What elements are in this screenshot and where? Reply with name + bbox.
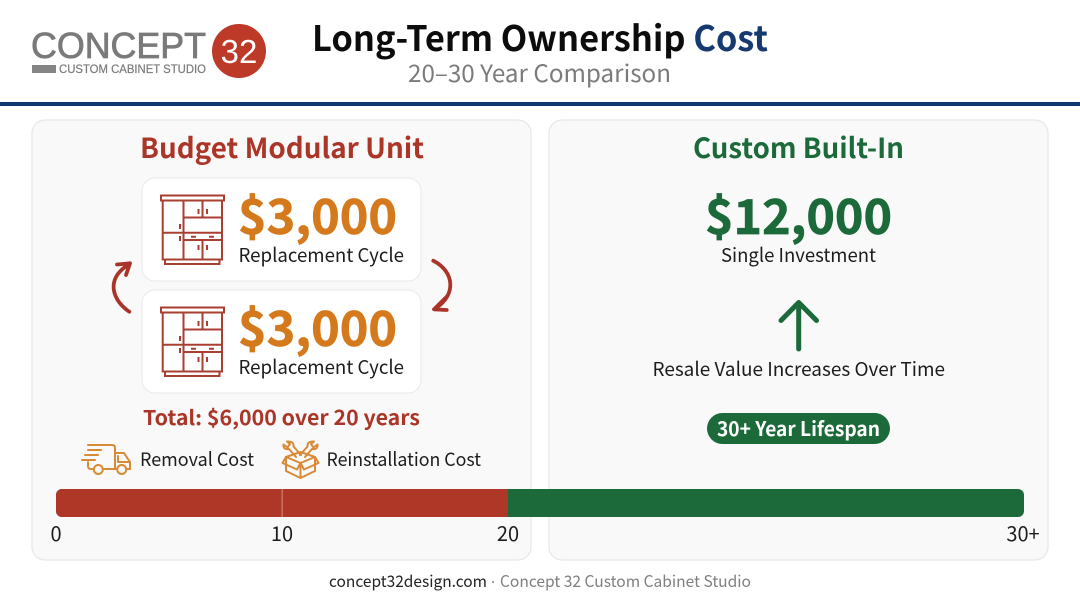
label: Replacement Cycle: [238, 353, 404, 380]
panel: custom built-in: [549, 120, 1048, 560]
axis labels: [50, 518, 1040, 547]
price: $3,000: [238, 178, 397, 248]
card: second replacement: [142, 290, 421, 393]
heading: budget modular unit: Budget Modular Unit: [140, 127, 424, 167]
axis labels: 10: [271, 518, 293, 547]
header rule: [0, 102, 1080, 106]
axis labels: 20: [497, 518, 519, 547]
label: reinstallation cost: Reinstallation Cost: [326, 446, 481, 472]
footer: Concept 32 Custom Cabinet Studio: [500, 568, 751, 592]
label: resale value: Resale Value Increases Over Time: [652, 355, 945, 382]
logo: 32: [221, 33, 257, 70]
icon: cabinet: [161, 196, 224, 264]
axis labels: 0: [50, 518, 62, 547]
arrow: value up: [781, 302, 816, 349]
axis labels: 30+: [1006, 518, 1040, 547]
logo: CONCEPT: [31, 25, 206, 66]
icon: cabinet: [161, 308, 224, 376]
panel: budget modular unit: [32, 120, 531, 560]
logo: CUSTOM CABINET STUDIO: [59, 64, 206, 76]
icon: box with tools: [282, 441, 318, 478]
footer: concept32design.com: [329, 568, 487, 592]
arrow: cycle up: [114, 263, 130, 312]
subtitle: 20–30 Year Comparison: [408, 54, 671, 89]
label: removal cost: Removal Cost: [140, 446, 254, 472]
title: Long-Term Ownership Cost: [312, 11, 768, 62]
total: Total: $6,000 over 20 years: [143, 401, 420, 431]
arrow: cycle down: [433, 261, 450, 310]
label: Replacement Cycle: [238, 241, 404, 268]
timeline bar: [50, 489, 1040, 547]
price: $3,000: [238, 290, 397, 360]
card: first replacement: [142, 178, 421, 281]
footer: [329, 568, 751, 592]
badge: lifespan: 30+ Year Lifespan: [717, 413, 880, 442]
heading: custom built-in: Custom Built-In: [693, 127, 904, 167]
logo: [31, 24, 266, 78]
price: $12,000: [705, 178, 892, 248]
label: single investment: Single Investment: [721, 241, 876, 268]
icon: truck: [82, 445, 130, 474]
